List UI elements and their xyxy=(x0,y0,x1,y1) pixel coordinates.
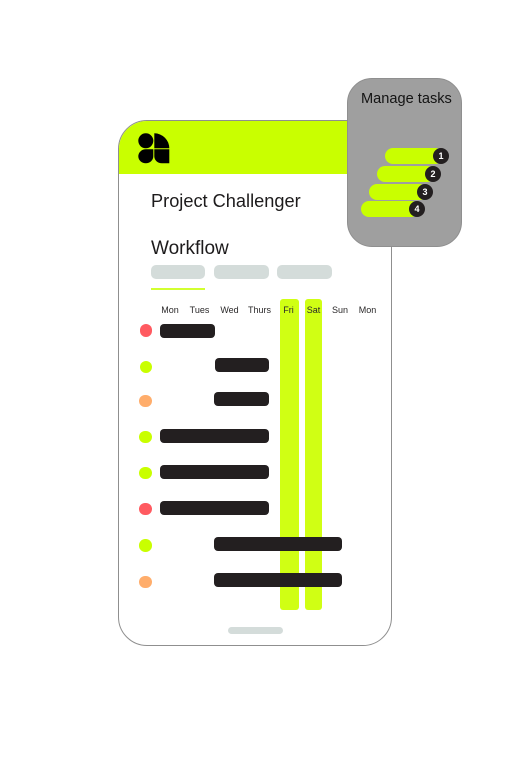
task bar 7 xyxy=(214,537,342,551)
number badge 4 xyxy=(409,201,425,217)
task bar 8 xyxy=(214,573,342,587)
home indicator xyxy=(228,627,283,634)
phone card xyxy=(118,120,392,646)
Sun: Sun xyxy=(332,305,348,315)
Thurs: Thurs xyxy=(248,305,271,315)
status dot 3 xyxy=(139,394,152,407)
status dot 6 xyxy=(139,502,152,515)
phone outline xyxy=(118,120,392,646)
task pill 1 xyxy=(385,148,449,164)
task bar 5 xyxy=(160,464,269,478)
task pill 4 xyxy=(361,201,425,217)
Mon: Mon xyxy=(359,305,376,315)
Sat: Sat xyxy=(307,305,320,315)
tab 3 xyxy=(277,265,332,279)
active tab underline xyxy=(151,288,205,290)
task bar 3 xyxy=(214,392,268,406)
panel heading: Manage tasks xyxy=(361,91,452,107)
heading: Workflow: Workflow xyxy=(151,238,229,259)
status dot 4 xyxy=(139,430,152,443)
task bar 2 xyxy=(214,358,269,372)
header band xyxy=(119,121,391,174)
icon: logo xyxy=(138,133,170,164)
pill xyxy=(385,148,443,164)
Mon: Mon xyxy=(161,305,179,315)
tabs xyxy=(151,265,332,290)
status dot 1 xyxy=(140,324,152,336)
panel: manage tasks xyxy=(347,78,462,247)
status dot 5 xyxy=(139,466,152,479)
tab 2 xyxy=(214,265,268,279)
status dot 7 xyxy=(139,539,152,552)
Fri: Fri xyxy=(283,305,294,315)
title: Project Challenger: Project Challenger xyxy=(151,191,301,211)
number badge 3: 3 xyxy=(422,186,428,196)
number badge 4: 4 xyxy=(414,204,420,214)
number badge 3 xyxy=(417,184,433,200)
day labels xyxy=(161,305,376,315)
highlight column: Sat xyxy=(305,299,322,610)
number badge 1 xyxy=(433,148,449,164)
status dot 2 xyxy=(140,360,152,373)
task bar 6 xyxy=(160,500,269,514)
pill xyxy=(377,166,435,182)
number badge 2: 2 xyxy=(430,169,436,179)
task pill 3 xyxy=(369,184,433,200)
tab 1 xyxy=(150,265,205,279)
task bar 4 xyxy=(160,428,269,442)
pill xyxy=(369,184,427,200)
number badge 1: 1 xyxy=(438,151,444,161)
Tues: Tues xyxy=(190,305,209,315)
highlight column: Fri xyxy=(280,299,299,610)
task bar 1 xyxy=(160,324,214,338)
status dot 8 xyxy=(139,576,152,588)
pill xyxy=(361,201,419,217)
number badge 2 xyxy=(425,166,441,182)
task pill 2 xyxy=(377,166,441,182)
Wed: Wed xyxy=(220,305,239,315)
